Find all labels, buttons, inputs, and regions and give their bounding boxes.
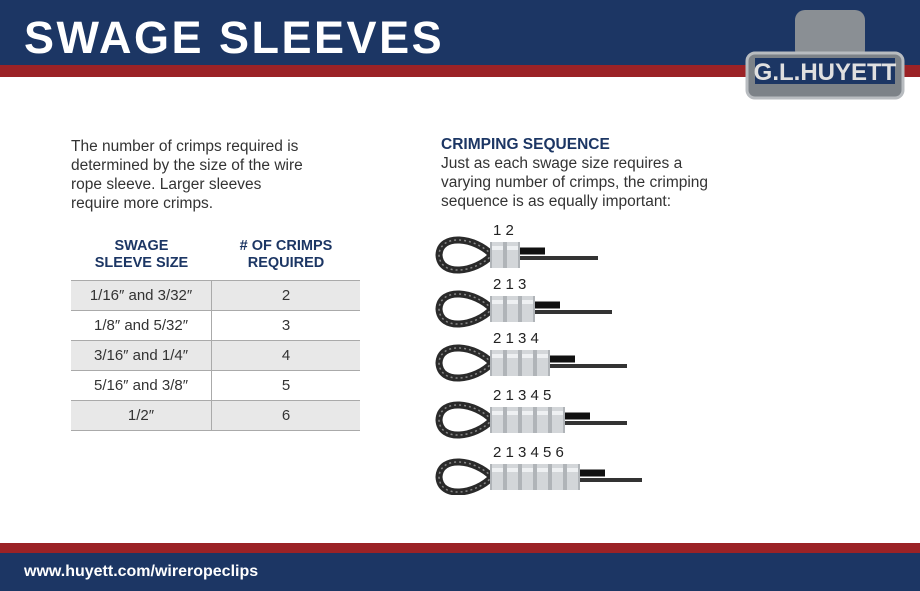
rope diagrams xyxy=(436,222,642,495)
table: 5 xyxy=(282,377,290,394)
table: 3 xyxy=(282,317,290,334)
intro text xyxy=(71,138,303,212)
table: SLEEVE SIZE xyxy=(95,255,188,271)
table: 6 xyxy=(282,407,290,424)
table: # OF CRIMPS xyxy=(240,238,332,254)
intro text: The number of crimps required is xyxy=(71,138,298,155)
rope diagrams: 2 1 3 4 5 xyxy=(493,387,551,404)
table: 1/2″ xyxy=(128,407,154,424)
rope diagrams: 2 1 3 4 5 6 xyxy=(493,444,564,461)
crimping text: sequence is as equally important: xyxy=(441,193,671,210)
crimping heading: CRIMPING SEQUENCE xyxy=(441,136,610,153)
footer url: www.huyett.com/wireropeclips xyxy=(24,563,258,580)
table: 5/16″ and 3/8″ xyxy=(94,377,188,394)
logo xyxy=(746,10,904,100)
title: SWAGE SLEEVES xyxy=(24,12,444,63)
table: 4 xyxy=(282,347,290,364)
crimping text xyxy=(441,155,708,210)
table: 1/16″ and 3/32″ xyxy=(90,287,192,304)
footer xyxy=(0,543,920,553)
table: 3/16″ and 1/4″ xyxy=(94,347,188,364)
crimping text: Just as each swage size requires a xyxy=(441,155,682,172)
rope diagrams: 2 1 3 xyxy=(493,276,526,293)
logo: G.L.HUYETT xyxy=(754,59,897,86)
intro text: determined by the size of the wire xyxy=(71,157,303,174)
rope diagrams: 2 1 3 4 xyxy=(493,330,539,347)
table: 1/8″ and 5/32″ xyxy=(94,317,188,334)
crimping text: varying number of crimps, the crimping xyxy=(441,174,708,191)
table xyxy=(71,238,360,431)
rope diagrams: 1 2 xyxy=(493,222,514,239)
header band xyxy=(0,0,920,65)
intro text: rope sleeve. Larger sleeves xyxy=(71,176,261,193)
intro text: require more crimps. xyxy=(71,195,213,212)
table: REQUIRED xyxy=(248,255,324,271)
table: SWAGE xyxy=(114,238,168,254)
table: 2 xyxy=(282,287,290,304)
